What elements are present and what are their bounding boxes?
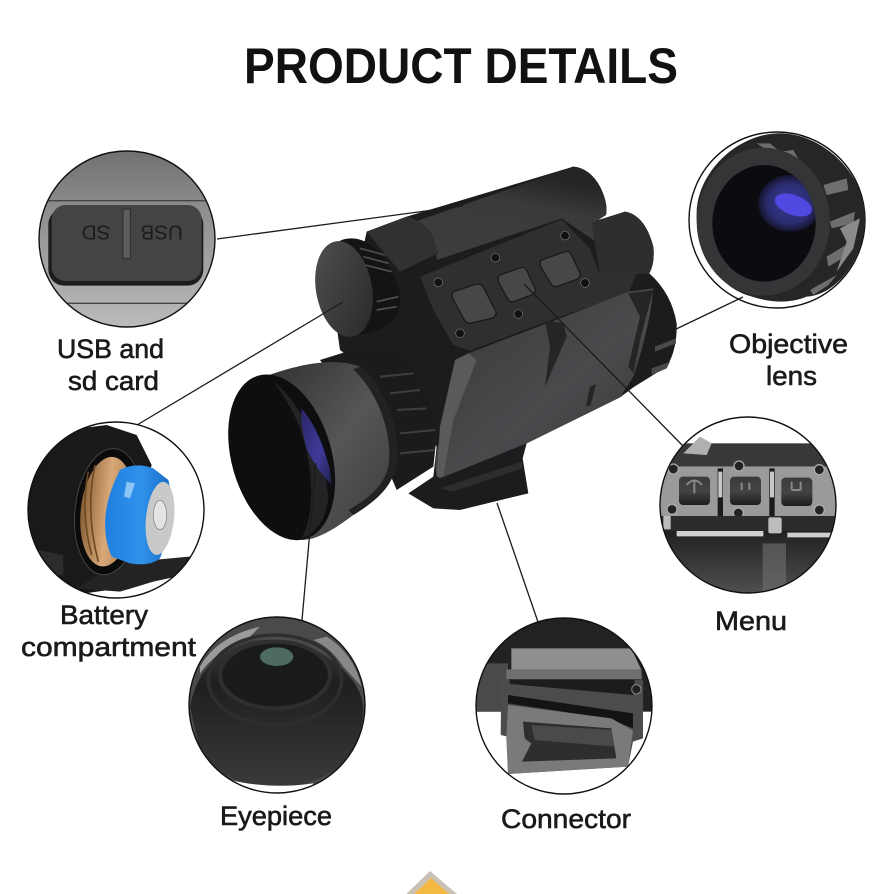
SD mark: SD bbox=[82, 220, 110, 243]
label: Menu: Menu bbox=[715, 606, 787, 636]
panel screws bbox=[434, 231, 589, 338]
blue battery bbox=[105, 465, 171, 564]
menu key bbox=[730, 477, 761, 505]
key glyphs bbox=[687, 480, 801, 493]
rim sheen right bbox=[313, 637, 362, 687]
label: Battery compartment: compartment bbox=[21, 632, 197, 662]
circle outline: battery bbox=[28, 422, 204, 598]
label: USB and sd card bbox=[57, 334, 164, 396]
battery cap bbox=[308, 237, 380, 341]
circle outline: USB bbox=[39, 151, 215, 327]
right barrel sheen bbox=[837, 218, 860, 272]
main bracket bbox=[501, 680, 643, 774]
battery knurled ring bbox=[335, 238, 400, 335]
outer blue glow bbox=[758, 175, 822, 232]
upper bands bbox=[671, 443, 826, 467]
main product: night vision monocular bbox=[210, 167, 677, 553]
label: Objective lens: lens bbox=[766, 361, 817, 391]
overall silhouette bbox=[337, 167, 677, 510]
detail: menu buttons bbox=[660, 436, 836, 592]
blue lens reflection bbox=[758, 175, 822, 232]
lower face bbox=[506, 705, 633, 774]
body ridges bbox=[545, 290, 653, 407]
title: PRODUCT DETAILS bbox=[244, 38, 678, 94]
left clip bbox=[663, 516, 671, 529]
black housing bbox=[27, 425, 152, 602]
leader lines bbox=[137, 206, 743, 622]
dark plug shadow bbox=[48, 208, 203, 286]
badge border bbox=[400, 871, 464, 894]
eyecup edge band bbox=[348, 367, 397, 515]
gold thread bbox=[80, 456, 126, 566]
eyepiece purple lens bbox=[301, 408, 332, 485]
eyecup opening bbox=[210, 362, 353, 553]
USB mark: USB bbox=[140, 220, 183, 243]
badge fill bbox=[408, 878, 456, 894]
bright streak bbox=[774, 194, 812, 216]
base ledge bbox=[440, 462, 523, 492]
lower left housing sheen bbox=[38, 550, 64, 575]
detail: eyepiece bbox=[187, 617, 367, 797]
control panel bbox=[420, 219, 637, 351]
label: Connector: Connector bbox=[501, 804, 631, 834]
top slab bbox=[511, 648, 641, 670]
lens well bbox=[712, 165, 816, 282]
dark slot bbox=[508, 695, 633, 728]
shadow under lip bbox=[510, 679, 635, 695]
slab lip bbox=[506, 669, 642, 679]
panel bbox=[657, 467, 843, 516]
dark upper background bbox=[475, 617, 661, 712]
eyepiece focus ring bbox=[320, 348, 437, 490]
positive terminal bbox=[153, 500, 167, 530]
objective dial ribs bbox=[652, 338, 676, 375]
seam lines bbox=[47, 201, 207, 303]
power key bbox=[679, 477, 710, 505]
circle outline: eyepiece bbox=[189, 617, 365, 793]
seat ring bbox=[74, 448, 135, 576]
menu button bbox=[498, 267, 535, 302]
knurl highlights bbox=[360, 248, 398, 310]
left grey background bbox=[475, 663, 508, 712]
barrel rib highlights bbox=[757, 143, 855, 295]
lower panel bbox=[664, 530, 832, 592]
screw bbox=[632, 685, 641, 694]
divider bbox=[123, 209, 130, 258]
cup interior bbox=[190, 640, 363, 787]
corner bracket bbox=[683, 437, 712, 455]
third button bbox=[540, 251, 580, 287]
circle outline: menu bbox=[660, 417, 836, 593]
third key bbox=[781, 478, 812, 506]
label: Battery compartment bbox=[21, 600, 197, 662]
label: USB and sd card: sd card bbox=[68, 366, 159, 396]
power button bbox=[452, 284, 496, 323]
label: Eyepiece: Eyepiece bbox=[220, 801, 332, 831]
right tube bbox=[592, 212, 654, 275]
battery compartment collar bbox=[367, 217, 438, 272]
inner ring bbox=[697, 148, 830, 296]
battery highlight bbox=[124, 482, 135, 498]
label: Battery compartment: Battery bbox=[60, 600, 149, 630]
rubber plug bbox=[52, 205, 202, 281]
top tube bbox=[415, 167, 607, 260]
light bars bbox=[677, 531, 832, 537]
eyecup bbox=[267, 362, 397, 540]
deep ring bbox=[208, 635, 342, 725]
recess bbox=[522, 722, 616, 762]
rim sheen left bbox=[200, 627, 260, 673]
detail: objective lens bbox=[697, 133, 865, 302]
panel band bbox=[657, 516, 843, 531]
label: USB and sd card: USB and bbox=[57, 334, 164, 364]
detail: connector bbox=[475, 617, 661, 774]
white lower sliver bbox=[223, 778, 313, 797]
thread lines bbox=[85, 465, 98, 562]
body side trim bbox=[437, 353, 477, 477]
label: Objective lens bbox=[729, 329, 848, 391]
focus ring ribs bbox=[380, 373, 435, 453]
cropped badge at bottom edge bbox=[400, 871, 464, 894]
slot highlights bbox=[718, 472, 774, 497]
inner ring bbox=[220, 642, 330, 708]
label: Objective lens: Objective bbox=[729, 329, 848, 359]
detail: USB and sd card bbox=[40, 152, 214, 326]
centre clip bbox=[768, 517, 782, 533]
outer lens barrel bbox=[697, 133, 865, 302]
circle outline: connector bbox=[476, 618, 652, 794]
centre glow bbox=[762, 543, 786, 591]
background housing bbox=[40, 152, 214, 326]
circle outline: objective lens bbox=[689, 132, 865, 308]
detail: battery compartment bbox=[28, 425, 190, 593]
glass reflection bbox=[260, 647, 293, 666]
rail bbox=[78, 556, 190, 592]
slot dividers bbox=[718, 468, 775, 516]
recess floor bbox=[531, 725, 614, 747]
battery metal end bbox=[146, 482, 174, 555]
screws bbox=[667, 461, 824, 518]
rim bbox=[187, 617, 367, 797]
inner eyecup shading bbox=[273, 382, 328, 538]
lower body bbox=[436, 288, 653, 478]
